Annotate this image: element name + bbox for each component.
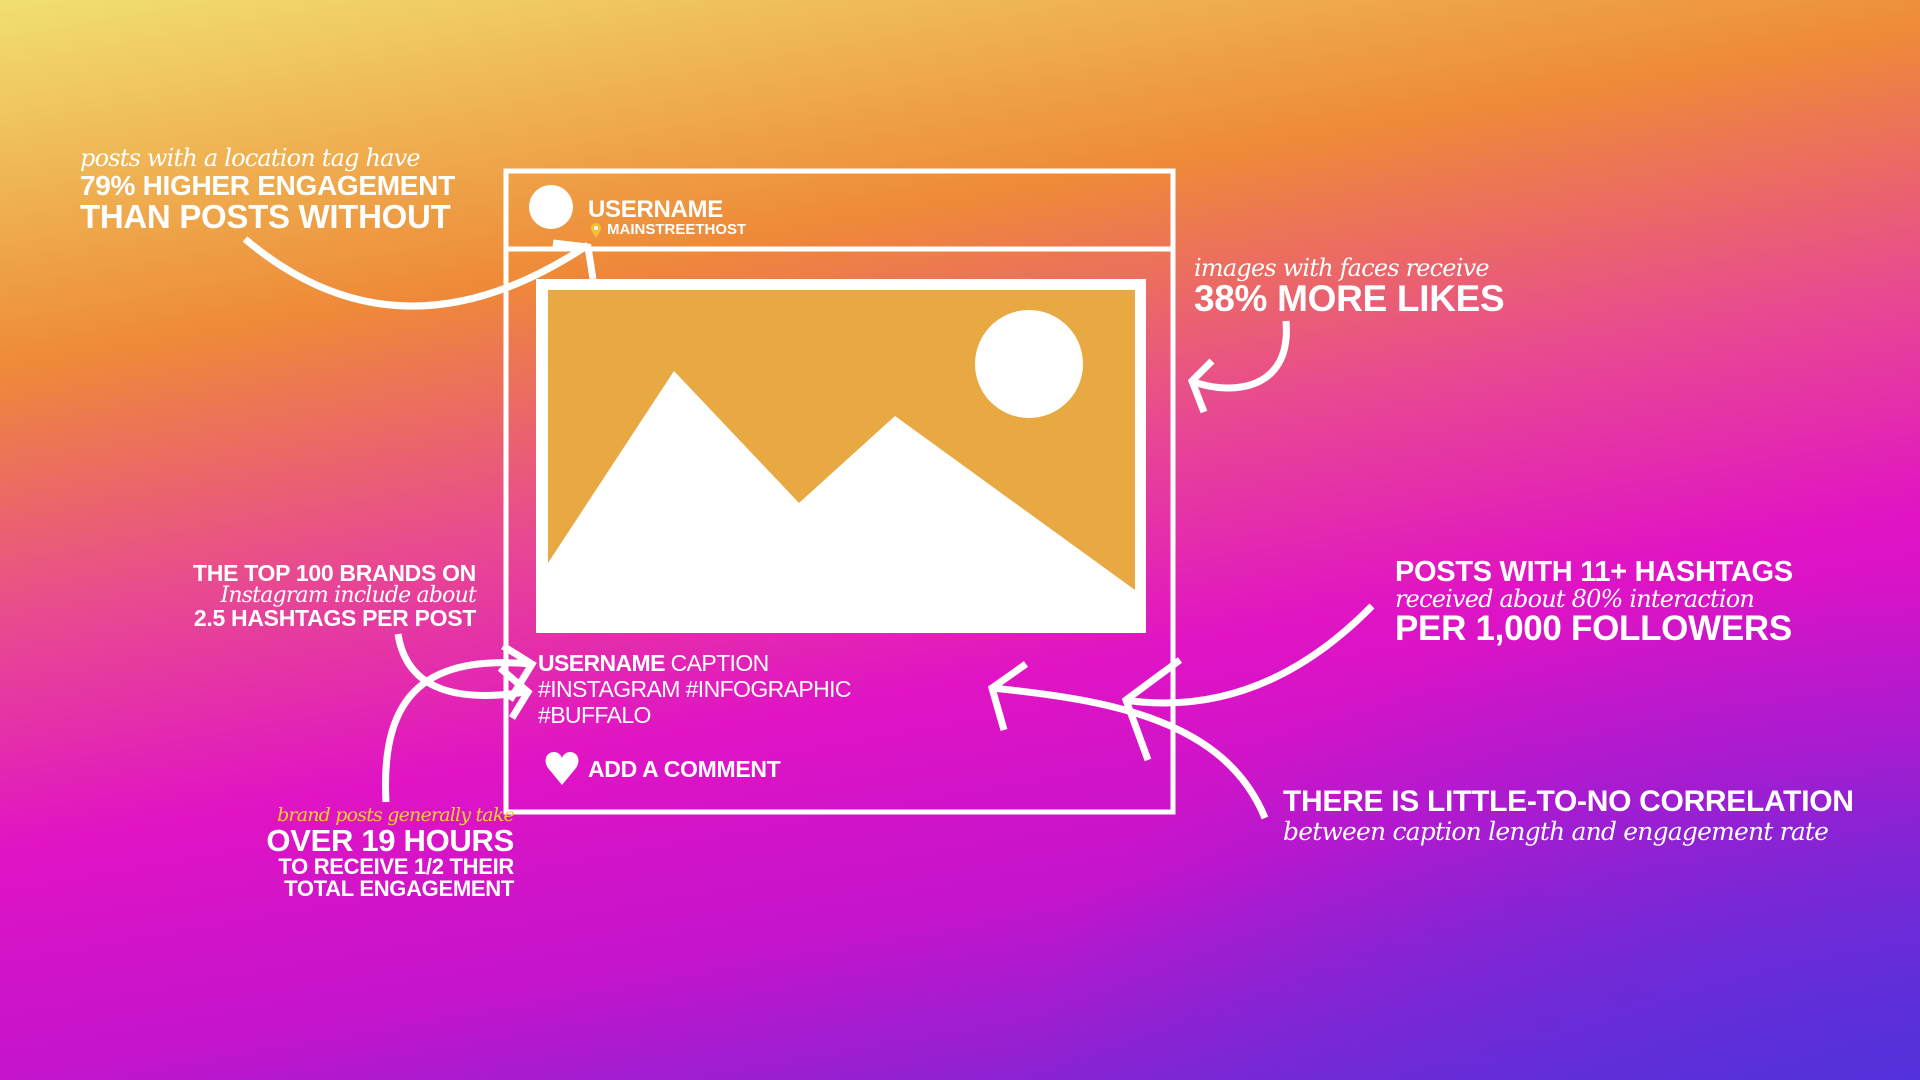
callout: caption correlation <box>1283 785 1854 846</box>
callout: location tag: THAN POSTS WITHOUT <box>80 198 450 235</box>
arrow: top brands <box>398 634 528 718</box>
add a comment: ADD A COMMENT <box>588 756 780 782</box>
caption text: #INSTAGRAM #INFOGRAPHIC <box>538 676 851 702</box>
image placeholder <box>536 279 1146 633</box>
caption text: USERNAME CAPTION <box>538 650 769 676</box>
callout: 11+ hashtags: POSTS WITH 11+ HASHTAGS <box>1395 556 1793 588</box>
callout: location tag: 79% HIGHER ENGAGEMENT <box>80 170 455 201</box>
callout: location tag: posts with a location tag have <box>80 144 420 172</box>
arrow: location <box>245 239 593 306</box>
caption text: #BUFFALO <box>538 702 651 728</box>
callout: top 100 brands <box>193 560 477 631</box>
callout: faces <box>1194 254 1504 319</box>
callout: faces: images with faces receive <box>1194 254 1489 282</box>
callout: 11+ hashtags: PER 1,000 FOLLOWERS <box>1395 609 1792 648</box>
avatar <box>529 185 573 229</box>
callout: top 100 brands: THE TOP 100 BRANDS ON <box>193 560 476 586</box>
callout: brand posts hours: OVER 19 HOURS <box>266 823 514 858</box>
callout: brand posts hours: brand posts generally take <box>277 804 514 826</box>
post frame <box>506 171 1173 812</box>
callout: top 100 brands: 2.5 HASHTAGS PER POST <box>194 605 476 631</box>
heart icon <box>546 752 578 785</box>
callout: caption correlation: between caption length and engagement rate <box>1283 817 1828 846</box>
callout: caption correlation: THERE IS LITTLE-TO-NO CORRELATION <box>1283 785 1854 818</box>
arrow: hashtags <box>1124 606 1372 760</box>
callout: brand posts hours: TOTAL ENGAGEMENT <box>284 876 514 901</box>
callout: brand posts hours <box>266 804 514 901</box>
caption text <box>538 650 851 728</box>
arrow: brand posts hours <box>386 646 532 802</box>
arrow: caption length <box>992 664 1265 818</box>
callout: brand posts hours: TO RECEIVE 1/2 THEIR <box>278 854 514 879</box>
callout: top 100 brands: Instagram include about <box>220 583 476 608</box>
arrow: faces <box>1192 321 1286 412</box>
callout: location tag <box>80 144 455 235</box>
location pin <box>591 223 601 238</box>
callout: 11+ hashtags <box>1395 556 1793 648</box>
callout: 11+ hashtags: received about 80% interaction <box>1395 585 1754 613</box>
post header username: USERNAME <box>588 196 723 223</box>
callout: faces: 38% MORE LIKES <box>1194 278 1504 319</box>
post location: MAINSTREETHOST <box>607 221 746 238</box>
